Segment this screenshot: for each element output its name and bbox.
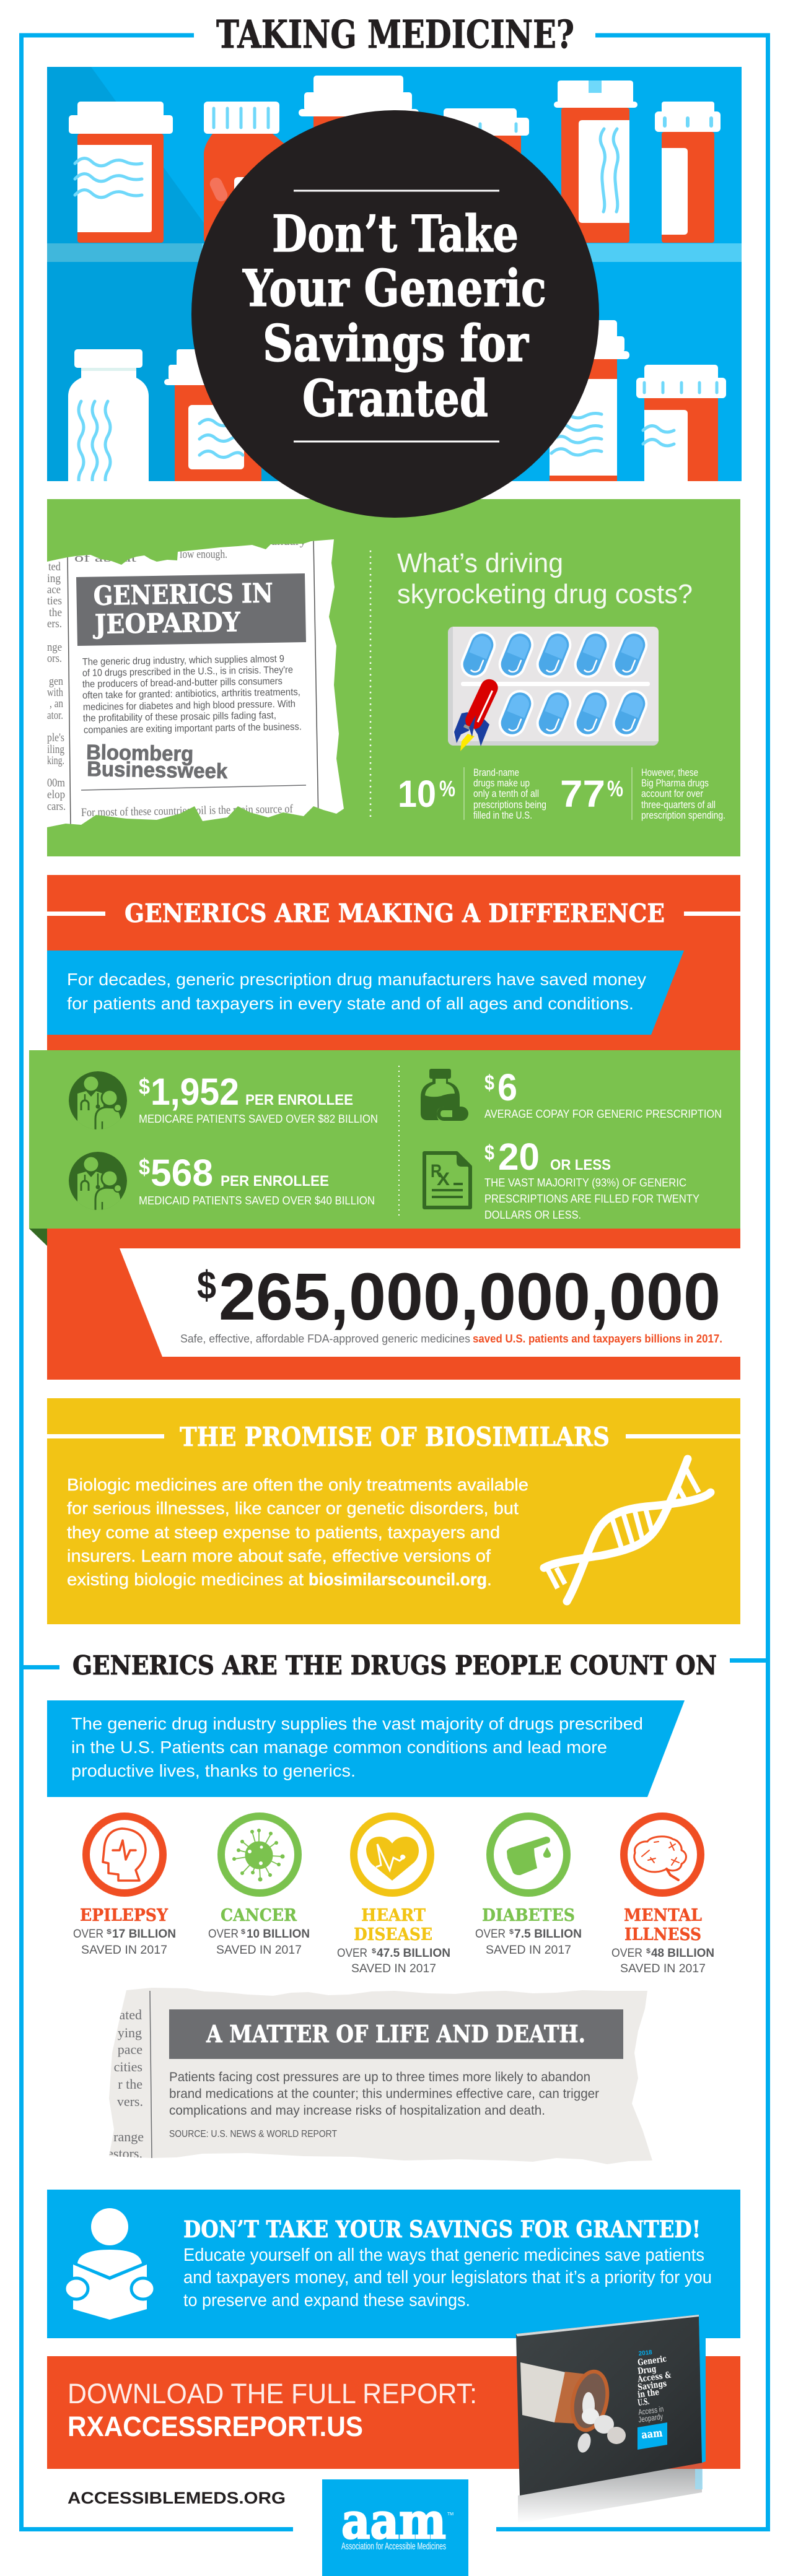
shelf (47, 243, 742, 262)
cover text: 2018 (638, 2349, 653, 2357)
clipping paragraph: The generic drug industry, which supplies almost 9 (82, 654, 284, 668)
question heading: What’s driving (397, 548, 563, 578)
stat: 10 percent: drugs make up (473, 777, 530, 789)
panel: a matter of life and death clipping (105, 1985, 657, 2167)
condition: heart disease (337, 1816, 450, 1975)
stat: 77 percent: three-quarters of all (641, 799, 716, 811)
headline: Your Generic (242, 259, 546, 318)
cover text: in the (637, 2387, 660, 2400)
icon: doctor and patient (69, 1071, 127, 1131)
headline circle (191, 110, 599, 518)
bottle 5 (554, 80, 637, 243)
condition: cancer: 10 BILLION (247, 1928, 310, 1941)
newspaper margin fragments: of about (74, 552, 137, 565)
body text: insurers. Learn more about safe, effective versions of (67, 1546, 491, 1565)
icon: blister pack of pills (448, 627, 659, 746)
stat: 77 percent: However, these (641, 767, 698, 778)
clipping margin fragments: pace (118, 2042, 142, 2057)
Bloomberg Businessweek logo: Bloomberg (86, 741, 193, 766)
stat: 20 dollars or less (484, 1136, 699, 1221)
panel: generics are making a difference (29, 875, 740, 1380)
newspaper margin fragments: iling (47, 743, 64, 756)
stat: 77 percent (560, 767, 725, 821)
stat: 6 dollar copay (484, 1066, 722, 1120)
bottle 9 (550, 320, 629, 481)
call to action text: and taxpayers money, and tell your legislators that it’s a priority for you (183, 2268, 712, 2287)
stat: 77 percent: Big Pharma drugs (641, 777, 709, 789)
icon: prescription document: R (431, 1161, 442, 1181)
clipping paragraph: the profitability of these prosaic pills fading fast, (83, 710, 276, 724)
body text: for serious illnesses, like cancer or genetic disorders, but (67, 1499, 519, 1518)
newspaper margin fragments: low enough. (180, 548, 227, 561)
icon: heart with pulse (354, 1816, 431, 1893)
section heading: drugs people count on: GENERICS ARE THE DRUGS PEOPLE COUNT ON (72, 1650, 717, 1681)
newspaper margin fragments: king. (47, 754, 64, 767)
icon: brain (624, 1816, 701, 1893)
call to action text: Educate yourself on all the ways that generic medicines save patients (183, 2245, 704, 2265)
panel: download the full report: DOWNLOAD THE FULL REPORT: (68, 2378, 477, 2409)
bottle photo on cover (520, 2362, 626, 2454)
condition: cancer: CANCER (221, 1906, 297, 1925)
blue intro banner (47, 951, 684, 1035)
condition: epilepsy: OVER (73, 1928, 103, 1941)
icon: medicine bottle and capsule (421, 1069, 468, 1121)
condition: cancer: SAVED IN 2017 (216, 1944, 302, 1957)
stat: 1,952 per enrollee: MEDICARE PATIENTS SAVED OVER $82 BILLION (139, 1113, 378, 1125)
stat: 568 per enrollee (139, 1152, 375, 1207)
cover text: Savings (637, 2379, 667, 2393)
white total savings banner: Safe, effective, affordable FDA-approved generic medicines (180, 1332, 470, 1345)
bottle 4 (444, 108, 529, 154)
condition: diabetes: OVER (475, 1928, 506, 1941)
bottle 7 (68, 349, 149, 488)
condition: diabetes (475, 1816, 582, 1957)
blue intro banner: The generic drug industry supplies the vast majority of drugs prescribed (71, 1714, 643, 1733)
condition: mental illness: OVER (611, 1947, 642, 1960)
blue intro banner: For decades, generic prescription drug manufacturers have saved money (67, 970, 646, 989)
stat: 10 percent: only a tenth of all (473, 788, 539, 799)
condition: heart disease: $ (372, 1947, 376, 1955)
cover text: Generic (637, 2354, 667, 2368)
condition: diabetes: DIABETES (482, 1906, 575, 1925)
Bloomberg Businessweek logo: Businessweek (87, 757, 228, 783)
stat: 77 percent: % (607, 776, 623, 801)
clipping paragraph: medicines for diabetes and high blood pressure. With (83, 699, 296, 713)
stat: 77 percent: account for over (641, 788, 703, 799)
section heading: THE PROMISE OF BIOSIMILARS (180, 1422, 610, 1452)
condition: heart disease: DISEASE (354, 1925, 432, 1944)
white total savings banner: 265,000,000,000 (219, 1259, 721, 1334)
newspaper margin fragments: ace (47, 583, 61, 596)
panel: download the full report (47, 2356, 740, 2469)
icon: person reading (64, 2208, 155, 2320)
newspaper margin fragments: ator. (47, 709, 63, 722)
icon: finger with blood drop (490, 1816, 567, 1893)
title: TAKING MEDICINE? (216, 12, 574, 57)
newspaper margin fragments: gen (49, 675, 63, 688)
condition: diabetes: SAVED IN 2017 (486, 1944, 571, 1957)
cover text: Jeopardy (637, 2411, 664, 2424)
newspaper margin fragments: January (266, 535, 307, 548)
bottle 1 (69, 102, 173, 243)
blue intro banner: productive lives, thanks to generics. (71, 1761, 356, 1780)
bottle 3 (299, 76, 419, 128)
AAM logo: Association for Accessible Medicines (341, 2541, 446, 2552)
clipping headline: A MATTER OF LIFE AND DEATH. (206, 2020, 585, 2048)
newspaper margin fragments: cars. (47, 800, 66, 813)
AAM logo: TM (447, 2512, 453, 2517)
condition: heart disease: 47.5 BILLION (377, 1947, 450, 1960)
stat: 10 percent (398, 767, 546, 821)
bottle 2 (204, 102, 284, 242)
condition: mental illness: SAVED IN 2017 (620, 1962, 706, 1975)
condition: epilepsy: SAVED IN 2017 (81, 1944, 167, 1957)
clipping margin fragments: range (113, 2129, 144, 2144)
icon: prescription document: X (437, 1169, 450, 1190)
clipping headline box: JEOPARDY (92, 607, 241, 640)
clipping margin fragments (107, 2007, 144, 2161)
body text: . (487, 1570, 492, 1589)
clipping headline box: GENERICS IN (93, 578, 273, 612)
condition: epilepsy: $ (107, 1928, 112, 1936)
cover text: U.S. (637, 2396, 650, 2408)
question heading: skyrocketing drug costs? (397, 579, 693, 609)
cover text: Access in (637, 2404, 664, 2417)
stat: 6 dollar copay: 6 (497, 1066, 517, 1108)
clipping paragraph: complications and may increase risks of hospitalization and death. (169, 2104, 545, 2118)
white total savings banner (120, 1248, 740, 1357)
stat: 568 per enrollee: 568 (151, 1152, 213, 1194)
icon: doctor and patient (69, 1152, 127, 1212)
newspaper margin fragments: ted (48, 560, 61, 573)
condition: mental illness (611, 1816, 714, 1975)
headline: Savings for (263, 315, 529, 373)
stat: 568 per enrollee: MEDICAID PATIENTS SAVED OVER $40 BILLION (139, 1194, 375, 1207)
panel: the promise of biosimilars (47, 1398, 740, 1624)
stat: 10 percent: prescriptions being (473, 799, 546, 811)
report cover (516, 2315, 706, 2523)
stat: 20 dollars or less: $ (484, 1141, 494, 1165)
stat: 568 per enrollee: $ (139, 1154, 150, 1180)
icon: virus cell (221, 1816, 298, 1893)
condition: cancer: OVER (208, 1928, 239, 1941)
AAM logo (322, 2479, 468, 2576)
clipping margin fragments: ying (118, 2025, 142, 2040)
headline (242, 205, 546, 429)
newspaper margin fragments: ties (47, 594, 62, 607)
blue intro banner: in the U.S. Patients can manage common conditions and lead more (71, 1738, 607, 1757)
clipping margin fragments: estors. (107, 2146, 142, 2161)
body text: existing biologic medicines at (67, 1570, 304, 1589)
stat: 1,952 per enrollee: $ (139, 1074, 150, 1099)
stat: 20 dollars or less: THE VAST MAJORITY (93%) OF GENERIC (484, 1177, 686, 1189)
stat: 1,952 per enrollee: PER ENROLLEE (245, 1092, 353, 1108)
stat: 10 percent: Brand-name (473, 767, 519, 778)
clipping paragraph (169, 2070, 599, 2139)
clipping margin fragments: ated (119, 2007, 142, 2022)
stat: 6 dollar copay: AVERAGE COPAY FOR GENERIC PRESCRIPTION (484, 1108, 722, 1120)
condition: cancer: $ (241, 1928, 245, 1936)
condition: cancer (208, 1816, 310, 1957)
newspaper margin fragments: ing (47, 572, 61, 585)
clipping paragraph: of 10 drugs prescribed in the U.S., is in crisis. They're (82, 665, 293, 679)
condition: diabetes: 7.5 BILLION (514, 1928, 582, 1941)
clipping paragraph: the producers of bread-and-butter pills consumers (82, 676, 283, 690)
newspaper margin fragments: 00m (47, 777, 65, 790)
bottle 10 (636, 365, 726, 481)
clipping headline box (76, 573, 306, 646)
condition: mental illness: ILLNESS (624, 1925, 701, 1944)
stat: 20 dollars or less: OR LESS (550, 1157, 611, 1173)
stat: 1,952 per enrollee (139, 1071, 378, 1125)
stat: 6 dollar copay: $ (484, 1071, 494, 1095)
newspaper margin fragments: For most of these countries, oil is the main source of (81, 803, 294, 819)
stat: 568 per enrollee: PER ENROLLEE (221, 1173, 329, 1190)
condition: epilepsy: 17 BILLION (112, 1928, 176, 1941)
stat: 20 dollars or less: 20 (498, 1136, 540, 1178)
stat: 20 dollars or less: PRESCRIPTIONS ARE FILLED FOR TWENTY (484, 1193, 699, 1205)
blue intro banner: for patients and taxpayers in every state and of all ages and conditions. (67, 994, 634, 1013)
body text: biosimilarscouncil.org (309, 1570, 487, 1589)
newspaper margin fragments: the (49, 606, 62, 619)
AAM logo: aam (341, 2492, 446, 2550)
question heading (397, 548, 693, 609)
stat: 1,952 per enrollee: 1,952 (151, 1071, 239, 1113)
clipping paragraph: brand medications at the counter; this undermines effective care, can trigger (169, 2087, 599, 2101)
condition: heart disease: SAVED IN 2017 (351, 1962, 436, 1975)
newspaper margin fragments: ors. (47, 652, 62, 665)
clipping margin fragments: vers. (117, 2094, 143, 2109)
stat: 10 percent: 10 (398, 773, 436, 815)
panel: download the full report: RXACCESSREPORT.US (68, 2411, 363, 2442)
website: ACCESSIBLEMEDS.ORG (68, 2489, 286, 2507)
clipping paragraph: SOURCE: U.S. NEWS & WORLD REPORT (169, 2129, 337, 2139)
panel: don't take your savings for granted (47, 2190, 740, 2338)
white total savings banner: $ (197, 1263, 216, 1307)
newspaper margin fragments: nge (47, 641, 62, 654)
clipping paragraph: often take for granted: antibiotics, arthritis treatments, (82, 687, 300, 701)
clipping paragraph: companies are exiting important parts of the business. (84, 721, 302, 736)
call to action text: to preserve and expand these savings. (183, 2291, 470, 2310)
condition: mental illness: 48 BILLION (651, 1947, 714, 1960)
call to action text (183, 2245, 712, 2310)
condition: epilepsy (73, 1816, 176, 1957)
newspaper margin fragments: elop (47, 788, 65, 801)
icon: prescription document (424, 1153, 470, 1208)
newspaper margin fragments: , an (50, 697, 63, 710)
green savings ribbon (29, 1050, 740, 1246)
clipping margin fragments: r the (118, 2076, 142, 2092)
condition: mental illness: MENTAL (624, 1906, 702, 1925)
bottle 6 (655, 102, 721, 243)
call to action heading: DON’T TAKE YOUR SAVINGS FOR GRANTED! (183, 2216, 701, 2243)
icon: head with pulse (86, 1816, 163, 1893)
condition: diabetes: $ (509, 1928, 514, 1936)
panel: pill bottle shelves (47, 67, 742, 488)
torn newspaper clipping (47, 533, 351, 836)
cover text: Access & (637, 2370, 672, 2385)
stat: 10 percent: filled in the U.S. (473, 809, 532, 821)
blue intro banner (47, 1700, 685, 1797)
newspaper margin fragments: ple's (47, 731, 64, 744)
icon: DNA helix (544, 1459, 711, 1601)
cover text: Drug (637, 2364, 657, 2377)
clipping margin fragments: cities (114, 2059, 142, 2074)
condition: heart disease: HEART (361, 1906, 426, 1925)
newspaper margin fragments: with (47, 686, 63, 699)
stat: 20 dollars or less: DOLLARS OR LESS. (484, 1209, 581, 1221)
icon: red rocket (454, 676, 501, 751)
newspaper margin fragments (47, 535, 307, 819)
cover text (637, 2349, 672, 2424)
condition: mental illness: $ (646, 1947, 651, 1955)
stat: 77 percent: prescription spending. (641, 809, 725, 821)
body text: Biologic medicines are often the only treatments available (67, 1475, 528, 1494)
clipping paragraph: Patients facing cost pressures are up to three times more likely to abandon (169, 2070, 590, 2084)
cover logo: aam (641, 2427, 663, 2442)
clipping paragraph (82, 654, 302, 736)
headline: Granted (302, 370, 488, 429)
clipping headline (169, 2009, 623, 2059)
Bloomberg Businessweek logo (87, 744, 228, 779)
headline: Don’t Take (272, 205, 519, 264)
stat: 10 percent: % (439, 776, 455, 801)
condition: heart disease: OVER (337, 1947, 367, 1960)
cover logo (637, 2422, 667, 2450)
newspaper margin fragments: ers. (47, 617, 62, 630)
section heading: GENERICS ARE MAKING A DIFFERENCE (125, 899, 665, 928)
bottle 8 (164, 349, 261, 481)
condition: epilepsy: EPILEPSY (80, 1906, 169, 1925)
body text: they come at steep expense to patients, taxpayers and (67, 1523, 500, 1542)
panel: what's driving drug costs (47, 499, 740, 856)
body text (67, 1475, 528, 1589)
white total savings banner: saved U.S. patients and taxpayers billions in 2017. (473, 1332, 722, 1345)
stat: 77 percent: 77 (560, 773, 605, 815)
